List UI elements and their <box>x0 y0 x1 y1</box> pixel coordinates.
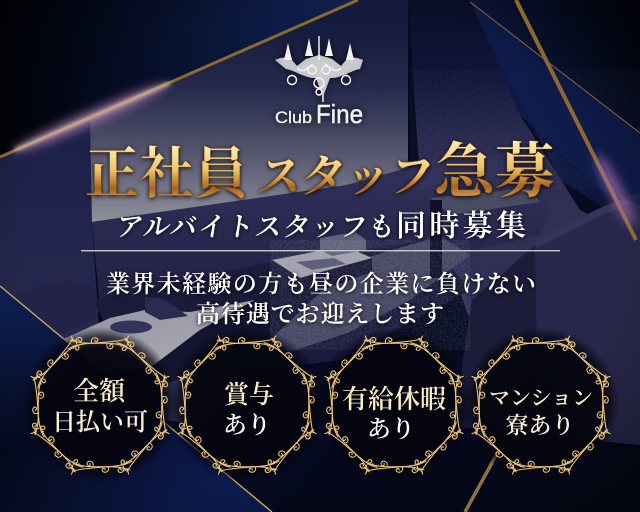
badge: 全額日払い可: 全額 <box>73 377 126 406</box>
left dark wall <box>0 117 100 345</box>
right partition <box>535 192 640 512</box>
upper left gold line <box>0 0 358 157</box>
badge: マンション寮あり: マンション <box>489 386 593 410</box>
wall texture <box>410 70 640 190</box>
front table <box>50 300 255 372</box>
right wide gold line <box>516 0 636 240</box>
carpet patches <box>270 236 470 352</box>
back table <box>430 188 540 215</box>
chandelier icon <box>275 36 363 102</box>
badge: 全額日払い可: 日払い可 <box>52 409 148 436</box>
sofa seat band <box>92 240 470 375</box>
body text: 業界未経験の方も昼の企業に負けない <box>106 271 536 298</box>
divider line <box>81 250 560 251</box>
subtitle: アルバイトスタッフも <box>114 212 397 242</box>
armchair <box>15 281 96 335</box>
lower left gold line <box>0 286 272 512</box>
lower right gold line <box>465 450 499 512</box>
badge: マンション寮あり: 寮あり <box>506 413 574 438</box>
thin right line <box>470 2 640 133</box>
flare on right line <box>591 151 639 229</box>
right textured wall <box>408 0 640 512</box>
sofa back <box>92 150 550 310</box>
back wall <box>90 0 408 222</box>
middle table <box>272 246 372 278</box>
subtitle <box>114 210 526 243</box>
logo: Club Fine chandelier: Fine <box>316 99 363 129</box>
table menu stand <box>145 297 188 320</box>
logo: Club Fine chandelier <box>275 36 363 129</box>
body text <box>106 271 536 328</box>
badge: マンション寮あり <box>463 327 619 483</box>
lower left navy panel <box>0 286 272 512</box>
badge: 賞与あり: 賞与 <box>224 381 274 409</box>
subtitle: 同時募集 <box>396 210 526 243</box>
title: gold headline: 正社員 <box>85 144 248 206</box>
title: gold headline: 急募 <box>434 139 555 205</box>
badge: 賞与あり: あり <box>223 413 271 439</box>
title: gold headline: スタッフ <box>255 151 436 202</box>
title: gold headline <box>85 139 555 206</box>
carpet texture <box>270 240 470 350</box>
body text: 高待遇でお迎えします <box>196 301 444 328</box>
bottom dark floor <box>272 425 640 512</box>
logo text: Club <box>275 108 312 127</box>
badge: 賞与あり <box>169 327 325 483</box>
badge: 有給休暇あり <box>316 327 472 483</box>
badge: 有給休暇あり: あり <box>367 417 415 443</box>
badge: 全額日払い可 <box>22 327 178 483</box>
badge: 有給休暇あり: 有給休暇 <box>342 385 446 414</box>
flare on upper left line <box>9 78 171 158</box>
upper right blue panel <box>470 0 640 205</box>
